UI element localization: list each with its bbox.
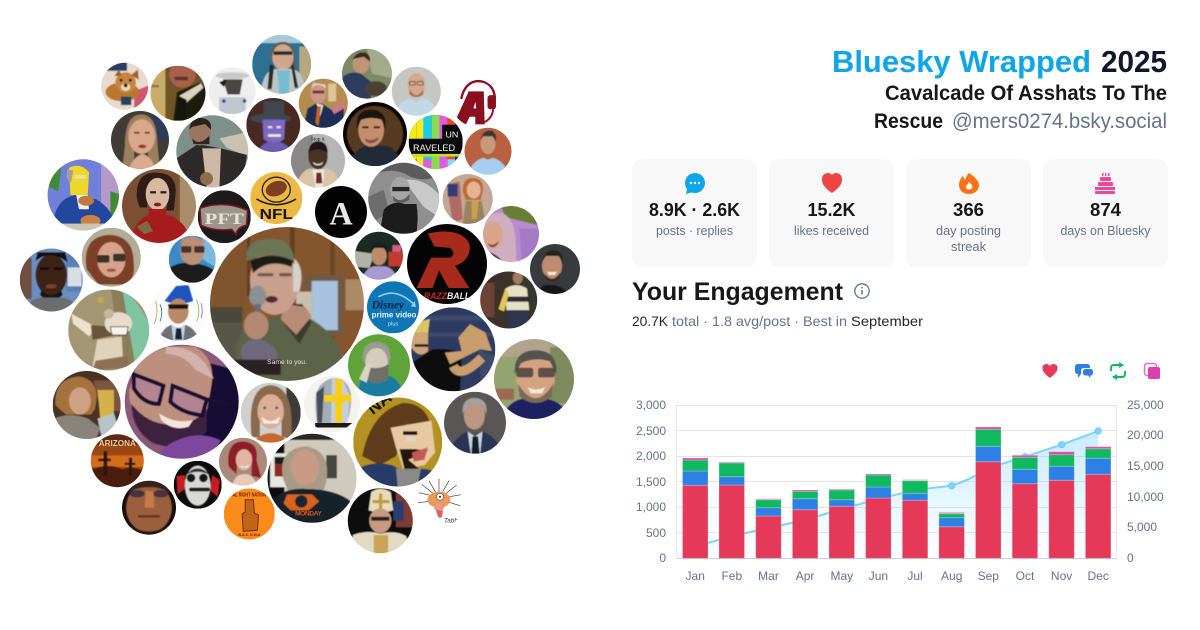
avatar: PFT badge — [198, 190, 251, 244]
avatar: blond woman in purple light — [483, 206, 539, 262]
bar: Mar — [756, 499, 781, 558]
left axis labels: 1,000 — [636, 500, 666, 514]
month labels: Apr — [796, 569, 814, 583]
panel: stat streak: streak — [951, 239, 986, 254]
avatar: bishop in white mitre — [348, 488, 413, 554]
avatar: young man in lavender shirt — [355, 232, 403, 280]
avatar: Bloom County orange cat: Tabby — [444, 518, 462, 525]
avatar: Griffin evil monkey cartoon — [68, 290, 150, 370]
month labels: Jul — [907, 569, 923, 583]
avatar: Disney prime video plus — [367, 281, 419, 334]
avatar: teen with feathered hair — [52, 371, 121, 439]
avatar: black-and-white man with clouds — [368, 162, 440, 234]
icon: replies chat bubbles — [1075, 364, 1093, 378]
avatar: smiling man with glasses and beard — [494, 339, 574, 419]
bar: Nov — [1049, 452, 1074, 558]
chart: monthly engagement stacked bars with cumulative line — [636, 398, 1164, 583]
month labels: May — [830, 569, 853, 583]
avatar: large man in army cap with telephone — [210, 227, 364, 381]
panel: stat posts and replies: 8.9K · 2.6K — [649, 200, 740, 220]
bar: Aug — [939, 512, 964, 558]
right axis labels: 20,000 — [1127, 428, 1164, 442]
panel: avatar bubble cluster — [13, 29, 585, 560]
month labels: Nov — [1051, 569, 1072, 583]
right axis labels: 25,000 — [1127, 398, 1164, 412]
text: engagement summary: total · 1.8 avg/post · Best in — [672, 313, 847, 329]
avatar: man with dog outdoors — [342, 48, 392, 99]
bar: Dec — [1085, 447, 1111, 558]
avatar: black A logo: A — [329, 195, 353, 231]
bar: Jun — [866, 474, 891, 558]
avatar: UNRAVELED test-card logo — [408, 115, 463, 169]
icon: speech bubble — [685, 173, 705, 194]
avatar: anime man with long hair — [353, 398, 442, 486]
icon: heart — [822, 173, 842, 193]
avatar: mitre with yellow cross — [304, 376, 360, 432]
left axis labels: 2,500 — [636, 424, 666, 438]
avatar: man laughing with glasses, purple — [124, 344, 239, 459]
left axis labels: 500 — [646, 526, 666, 540]
panel: stat posts and replies — [632, 159, 757, 267]
text: engagement summary: September — [851, 313, 923, 329]
avatar: large man in army cap with telephone: Same to you. — [267, 359, 307, 366]
avatar: Brock cartoon pointing — [411, 307, 496, 392]
panel: stat likes: likes received — [794, 223, 869, 238]
heading: title: Bluesky Wrapped — [832, 44, 1091, 79]
avatar: orange Al Right Nation badge — [224, 488, 275, 540]
month labels: Jan — [686, 569, 705, 583]
avatar: red-haired girl with flag — [442, 174, 493, 224]
avatar: vintage portrait with caption — [291, 134, 345, 188]
avatar: woman in red turtleneck — [122, 169, 196, 243]
avatar: man smiling dark background — [530, 244, 580, 294]
icon: birthday cake — [1095, 173, 1115, 194]
avatar: Arizona sunset badge: ARIZONA — [99, 439, 136, 448]
subtitle: display name and handle — [874, 82, 1167, 133]
text: engagement summary — [632, 313, 923, 329]
avatar: black A logo — [315, 186, 367, 238]
avatar: man against brick wall — [464, 128, 512, 175]
panel: stat posts and replies: posts · replies — [656, 223, 733, 238]
icon: reposts arrows — [1111, 362, 1125, 380]
panel: stat likes — [769, 159, 894, 267]
bar: Jul — [902, 479, 928, 558]
right axis labels: 0 — [1127, 551, 1134, 565]
right axis labels: 10,000 — [1127, 490, 1164, 504]
panel: stat likes: 15.2K — [808, 200, 856, 220]
month labels: Sep — [978, 569, 999, 583]
avatar: Black man selfie — [20, 248, 83, 312]
avatar: Razzball logo: RAZZBALL — [424, 291, 470, 302]
avatar: hockey player — [480, 272, 538, 328]
left axis labels — [636, 398, 666, 565]
avatar: woman curly hair glasses — [82, 228, 141, 287]
avatar: older politician in suit — [298, 78, 348, 128]
panel: stat streak: 366 — [953, 200, 984, 220]
cumulative line — [695, 428, 1101, 547]
icon: quotes squares — [1144, 364, 1160, 379]
month labels: Jun — [869, 569, 888, 583]
bar: Sep — [976, 427, 1001, 558]
avatar: Disney prime video plus: Disney — [371, 299, 405, 311]
month labels: Dec — [1088, 569, 1109, 583]
subtitle: display name and handle: @mers0274.bsky.social — [952, 110, 1167, 133]
month labels: Feb — [721, 569, 742, 583]
avatar: woman in Chicago Bears shirt — [268, 434, 356, 523]
avatar: UNRAVELED test-card logo: RAVELED — [413, 143, 456, 153]
avatar: orange Al Right Nation badge: B.A.S. N.W.A — [238, 533, 261, 537]
bar: Apr — [792, 490, 818, 558]
chart grid and axes — [676, 405, 1116, 558]
icon: flame — [959, 173, 979, 194]
avatar: man on couch — [176, 115, 248, 188]
avatar: anime man with long hair: NA — [363, 387, 396, 418]
left axis labels: 2,000 — [636, 449, 666, 463]
bar: May — [829, 489, 854, 558]
avatar: maroon headset A logo — [456, 80, 496, 124]
stacked bars — [682, 427, 1111, 558]
avatar: UNRAVELED test-card logo: UN — [445, 130, 458, 140]
avatar: face with round black eyes — [174, 460, 222, 509]
avatar: Skinner cartoon with burgers — [48, 159, 119, 231]
avatar: man with blue party hat — [154, 284, 203, 341]
avatar: close-up face with bruises — [122, 480, 176, 535]
avatar: purple villain in top hat — [246, 98, 300, 152]
avatar: man with glasses selfie — [168, 236, 216, 283]
avatar: dog — [101, 62, 148, 110]
heading: Your Engagement: Your Engagement — [632, 278, 844, 306]
avatar: green bearded cartoon — [348, 334, 410, 396]
icon: likes heart — [1042, 364, 1058, 378]
avatar: Disney prime video plus: plus — [388, 321, 398, 327]
month labels — [686, 569, 1109, 583]
avatar: bald man with glasses — [392, 66, 441, 116]
panel: stat days on Bluesky — [1043, 159, 1168, 267]
avatar: Arizona sunset badge — [90, 434, 144, 488]
month labels: Oct — [1016, 569, 1035, 583]
cumulative area fill — [695, 431, 1098, 558]
avatar: NFL logo: NFL — [260, 206, 293, 223]
panel: stat days on Bluesky: 874 — [1090, 200, 1121, 220]
avatar: PFT badge: PFT — [205, 211, 244, 228]
avatar: vintage portrait with caption: Stop it. — [310, 137, 326, 143]
month labels: Aug — [941, 569, 962, 583]
bar: Feb — [719, 462, 744, 558]
right axis labels: 5,000 — [1127, 520, 1157, 534]
right axis labels — [1127, 398, 1164, 565]
legend: engagement types — [1042, 362, 1160, 380]
left axis labels: 1,500 — [636, 475, 666, 489]
panel: stat streak: day posting — [936, 223, 1001, 238]
avatar: smiling man with black border — [343, 102, 407, 166]
heading: title: 2025 — [1101, 44, 1167, 79]
subtitle: display name and handle: Rescue — [874, 110, 943, 133]
avatar: red-haired woman — [219, 438, 267, 486]
avatar: woman selfie — [111, 111, 169, 169]
avatar: NFL logo — [250, 172, 302, 224]
subtitle: display name and handle: Cavalcade Of Asshats To The — [885, 82, 1167, 105]
bar: Jan — [682, 458, 708, 558]
avatar: woman with braids by the water — [252, 34, 312, 94]
avatar: black-and-white figure in hat — [209, 68, 256, 114]
left axis labels: 0 — [659, 551, 666, 565]
panel: stat streak — [906, 159, 1031, 267]
avatar: Disney prime video plus: prime video — [372, 310, 416, 320]
avatar: Razzball logo — [407, 224, 487, 304]
text: engagement summary: 20.7K — [632, 313, 669, 329]
month labels: Mar — [758, 569, 779, 583]
right axis labels: 15,000 — [1127, 459, 1164, 473]
avatar: man in dark suit, brown room — [150, 66, 206, 121]
avatar: Bloom County orange cat — [418, 478, 461, 522]
avatar: man in suit, grey studio — [444, 392, 506, 454]
icon: info — [855, 284, 869, 298]
bar: Oct — [1012, 455, 1038, 558]
avatar: smiling woman long hair — [240, 382, 301, 443]
left axis labels: 3,000 — [636, 398, 666, 412]
avatar: woman in Chicago Bears shirt: MONDAY — [295, 511, 322, 518]
panel: stat days on Bluesky: days on Bluesky — [1060, 223, 1151, 238]
